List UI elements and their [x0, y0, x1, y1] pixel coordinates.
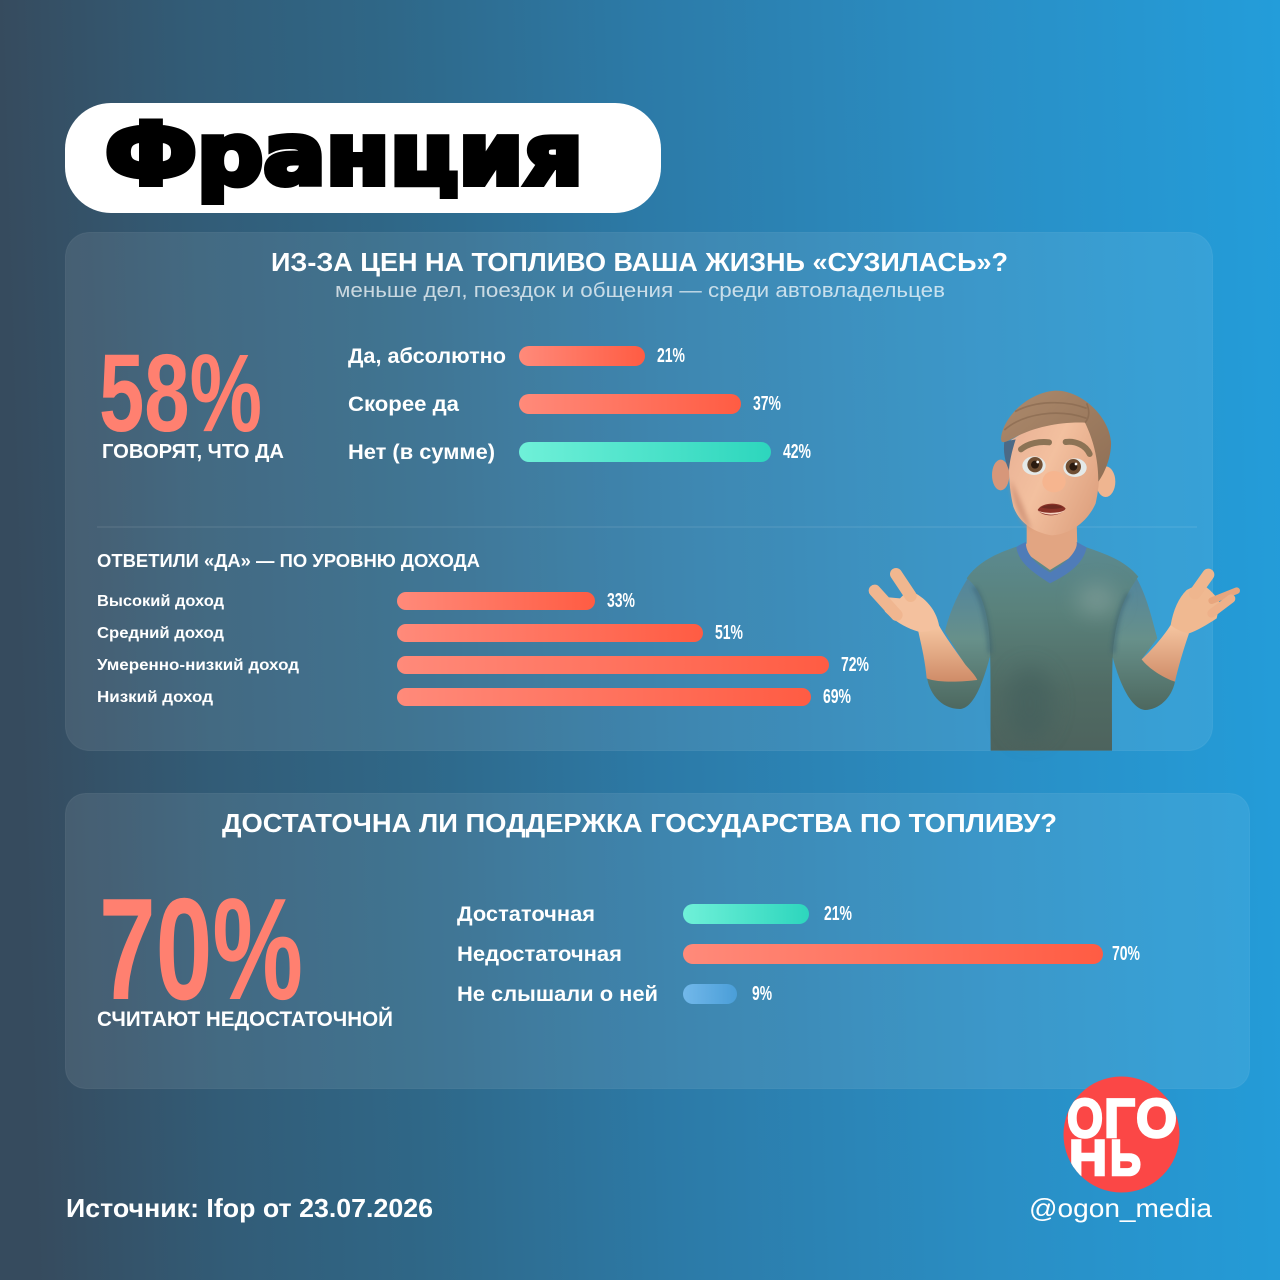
right sleeve fold — [1113, 593, 1128, 653]
key figure 58%: ГОВОРЯТ, ЧТО ДА — [102, 441, 284, 463]
logo letters: О — [1067, 1087, 1103, 1149]
bar chart: income: 33% — [607, 590, 635, 612]
title pill: Франция — [105, 105, 583, 205]
shirt shadow — [1007, 667, 1053, 740]
left ear — [992, 460, 1009, 490]
right eyebrow — [1066, 442, 1090, 454]
bar chart: answers: 42% — [783, 441, 811, 463]
logo letters — [1068, 1098, 1176, 1176]
left forearm — [918, 626, 977, 682]
bar chart: answers: Нет (в сумме) — [348, 441, 495, 464]
bar chart: income: Высокий доход — [97, 593, 224, 610]
key figure 58%: 58% — [99, 332, 262, 455]
logo letters: О — [1136, 1087, 1177, 1149]
left sleeve fold — [974, 587, 990, 653]
bar chart: answers — [348, 345, 811, 464]
bar chart: income: Низкий доход — [97, 689, 213, 706]
key figure 70%: 70% — [99, 868, 303, 1030]
logo: ОГОНЬ — [1064, 1076, 1180, 1192]
shirt highlight — [1077, 585, 1117, 615]
income section heading: ОТВЕТИЛИ «ДА» — ПО УРОВНЮ ДОХОДА — [97, 551, 480, 571]
bar chart: income — [97, 590, 869, 708]
key figure 70%: СЧИТАЮТ НЕДОСТАТОЧНОЙ — [97, 1007, 393, 1031]
illustration: shrugging man — [875, 391, 1237, 751]
bar chart: income: 51% — [715, 622, 743, 644]
social handle: @ogon_media — [1029, 1193, 1213, 1223]
source line: Источник: Ifop от 23.07.2026 — [66, 1193, 433, 1223]
panel: state support — [66, 794, 1250, 1088]
bar chart: support — [457, 903, 1140, 1006]
collar — [1016, 542, 1087, 583]
bar chart: income: Умеренно-низкий доход — [97, 657, 299, 674]
bar chart: income: 69% — [823, 686, 851, 708]
panel heading: ИЗ-ЗА ЦЕН НА ТОПЛИВО ВАША ЖИЗНЬ «СУЗИЛАСЬ»? — [271, 247, 1008, 277]
mouth — [1038, 504, 1066, 515]
left sleeve — [927, 570, 992, 709]
nose — [1042, 471, 1066, 492]
title pill — [65, 103, 661, 213]
left hand — [875, 574, 939, 632]
bar chart: support: Недостаточная — [457, 943, 622, 966]
head — [992, 391, 1115, 535]
hair — [1001, 391, 1111, 482]
panel: fuel prices — [66, 232, 1212, 750]
bar chart: support: 9% — [752, 983, 772, 1005]
panel subheading: меньше дел, поездок и общения — среди автовладельцев — [335, 280, 945, 302]
side hair — [1004, 439, 1016, 470]
face — [1009, 417, 1099, 535]
hair strands — [1004, 403, 1089, 430]
bar chart: support: Не слышали о ней — [457, 983, 658, 1006]
logo letters: Н — [1069, 1130, 1107, 1186]
left eye — [1022, 456, 1046, 475]
right forearm — [1142, 625, 1189, 682]
cheek shadow — [1010, 480, 1032, 530]
right sleeve — [1111, 568, 1175, 710]
logo letters: Ь — [1110, 1130, 1141, 1186]
bar chart: answers: 37% — [753, 393, 781, 415]
right ear — [1096, 466, 1115, 497]
bar chart: income: Средний доход — [97, 625, 224, 642]
neck — [1015, 522, 1087, 578]
right hand — [1171, 575, 1237, 633]
panel heading: ДОСТАТОЧНА ЛИ ПОДДЕРЖКА ГОСУДАРСТВА ПО ТОПЛИВУ? — [222, 808, 1057, 838]
bar chart: support: Достаточная — [457, 903, 595, 926]
logo letters: Г — [1104, 1087, 1135, 1149]
bar chart: answers: 21% — [657, 345, 685, 367]
bar chart: support: 21% — [824, 903, 852, 925]
bar chart: support: 70% — [1112, 943, 1140, 965]
bar chart: income: 72% — [841, 654, 869, 676]
left eyebrow — [1021, 442, 1049, 449]
torso — [967, 547, 1138, 751]
body and arms — [875, 522, 1237, 751]
bar chart: answers: Да, абсолютно — [348, 345, 506, 368]
bar chart: answers: Скорее да — [348, 393, 459, 416]
right eye — [1063, 458, 1087, 477]
